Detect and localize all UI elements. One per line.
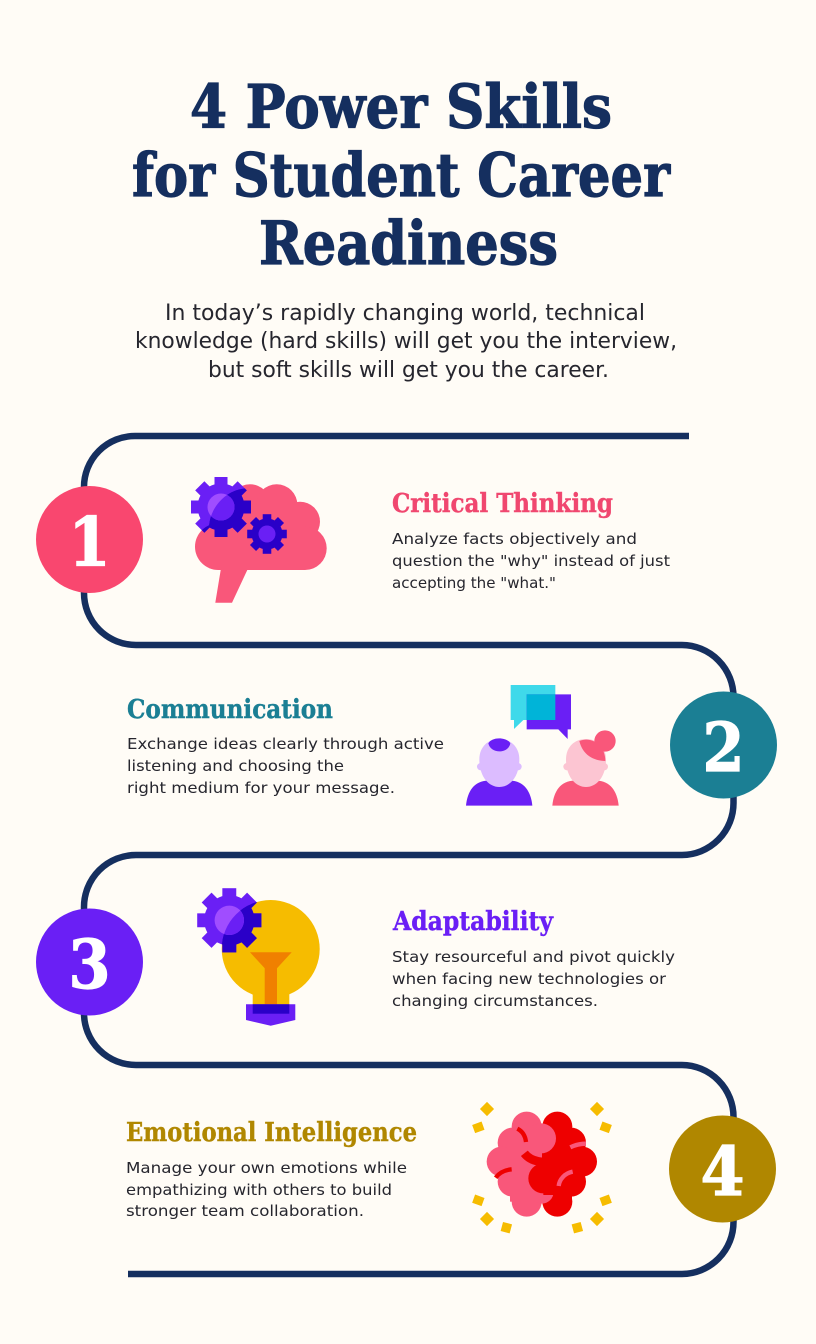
step 1 badge: [36, 486, 143, 593]
text: communication description: [127, 735, 444, 797]
title: Readiness: [259, 209, 558, 279]
winding path connector: [84, 436, 734, 1274]
heading: Critical Thinking: Critical Thinking: [392, 489, 613, 519]
title: 4 Power Skills: [190, 72, 612, 142]
text: adaptability description: [392, 948, 675, 1010]
text: emotional intelligence description: empathizing with others to build: [126, 1181, 392, 1199]
heading: Emotional Intelligence: Emotional Intelligence: [126, 1118, 417, 1148]
text: communication description: Exchange ideas clearly through active: [127, 735, 444, 753]
text: adaptability description: changing circumstances.: [392, 992, 598, 1010]
heading: Adaptability: Adaptability: [392, 907, 554, 937]
title: [132, 72, 671, 279]
text: emotional intelligence description: stronger team collaboration.: [126, 1202, 364, 1220]
step 4 badge: [669, 1116, 776, 1222]
text: communication description: listening and choosing the: [127, 757, 344, 775]
text: critical thinking description: Analyze facts objectively and: [392, 530, 637, 548]
heading: Communication: Communication: [127, 695, 333, 725]
intro text: In today’s rapidly changing world, technical: [165, 300, 645, 326]
text: adaptability description: Stay resourceful and pivot quickly: [392, 948, 675, 966]
icon: two-tone brain with sparks: [472, 1102, 612, 1233]
intro text: but soft skills will get you the career.: [208, 357, 609, 383]
icon: light bulb with gear: [197, 888, 320, 1026]
text: critical thinking description: accepting the "what.": [392, 574, 556, 592]
text: communication description: right medium for your message.: [127, 779, 395, 797]
text: critical thinking description: [392, 530, 670, 592]
title: for Student Career: [132, 141, 671, 211]
icon: two people talking: [466, 685, 619, 806]
step 3 badge: [36, 908, 143, 1016]
step 2 badge: [670, 692, 777, 798]
text: emotional intelligence description: [126, 1159, 407, 1220]
step 4 badge: 4: [700, 1132, 744, 1211]
text: emotional intelligence description: Manage your own emotions while: [126, 1159, 407, 1177]
intro text: [135, 300, 677, 383]
intro text: knowledge (hard skills) will get you the interview,: [135, 328, 677, 354]
step 3 badge: 3: [68, 925, 110, 1004]
icon: brain with gears: [191, 477, 327, 603]
text: critical thinking description: question the "why" instead of just: [392, 552, 670, 570]
step 2 badge: 2: [702, 708, 744, 787]
text: adaptability description: when facing new technologies or: [392, 970, 667, 988]
step 1 badge: 1: [68, 502, 110, 582]
